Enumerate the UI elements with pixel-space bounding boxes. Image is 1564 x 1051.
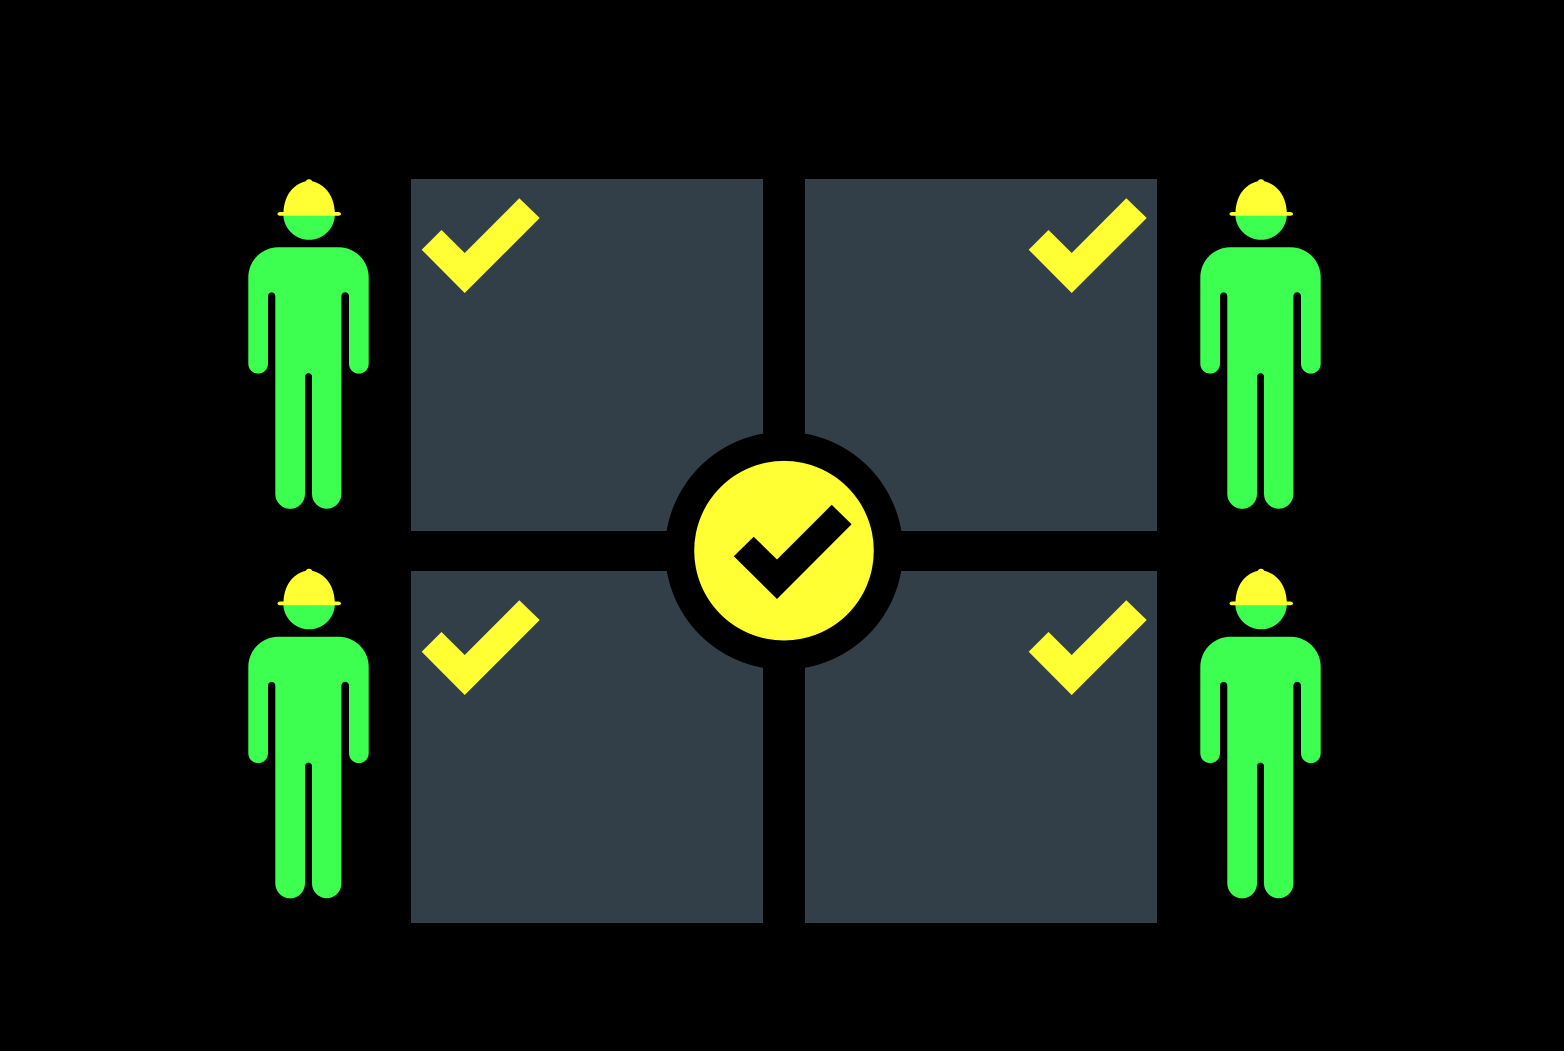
icon: badge check [734,505,852,599]
worker: top right [1200,179,1321,509]
worker: bottom right [1200,569,1321,898]
worker: bottom left [248,569,369,898]
worker helmet [1230,179,1293,216]
center badge [665,432,903,670]
worker body [1200,637,1321,898]
worker head [283,604,335,629]
panel: bottom left [411,571,763,923]
badge outer ring [665,432,903,670]
panel: bottom right [805,571,1157,923]
icon: check top right [1029,198,1147,293]
worker head [283,214,335,240]
worker body [248,637,369,898]
worker helmet [278,569,341,605]
worker: top left [248,179,369,509]
worker helmet [278,179,341,216]
icon: check top left [422,198,540,293]
worker body [1200,247,1321,509]
worker helmet [1230,569,1293,605]
icon: check bottom right [1029,600,1147,695]
worker head [1235,604,1287,629]
panel: top right [805,179,1157,531]
worker head [1235,214,1287,240]
badge yellow disc [694,461,874,640]
panel: top left [411,179,763,531]
worker body [248,247,369,509]
icon: check bottom left [422,600,540,695]
